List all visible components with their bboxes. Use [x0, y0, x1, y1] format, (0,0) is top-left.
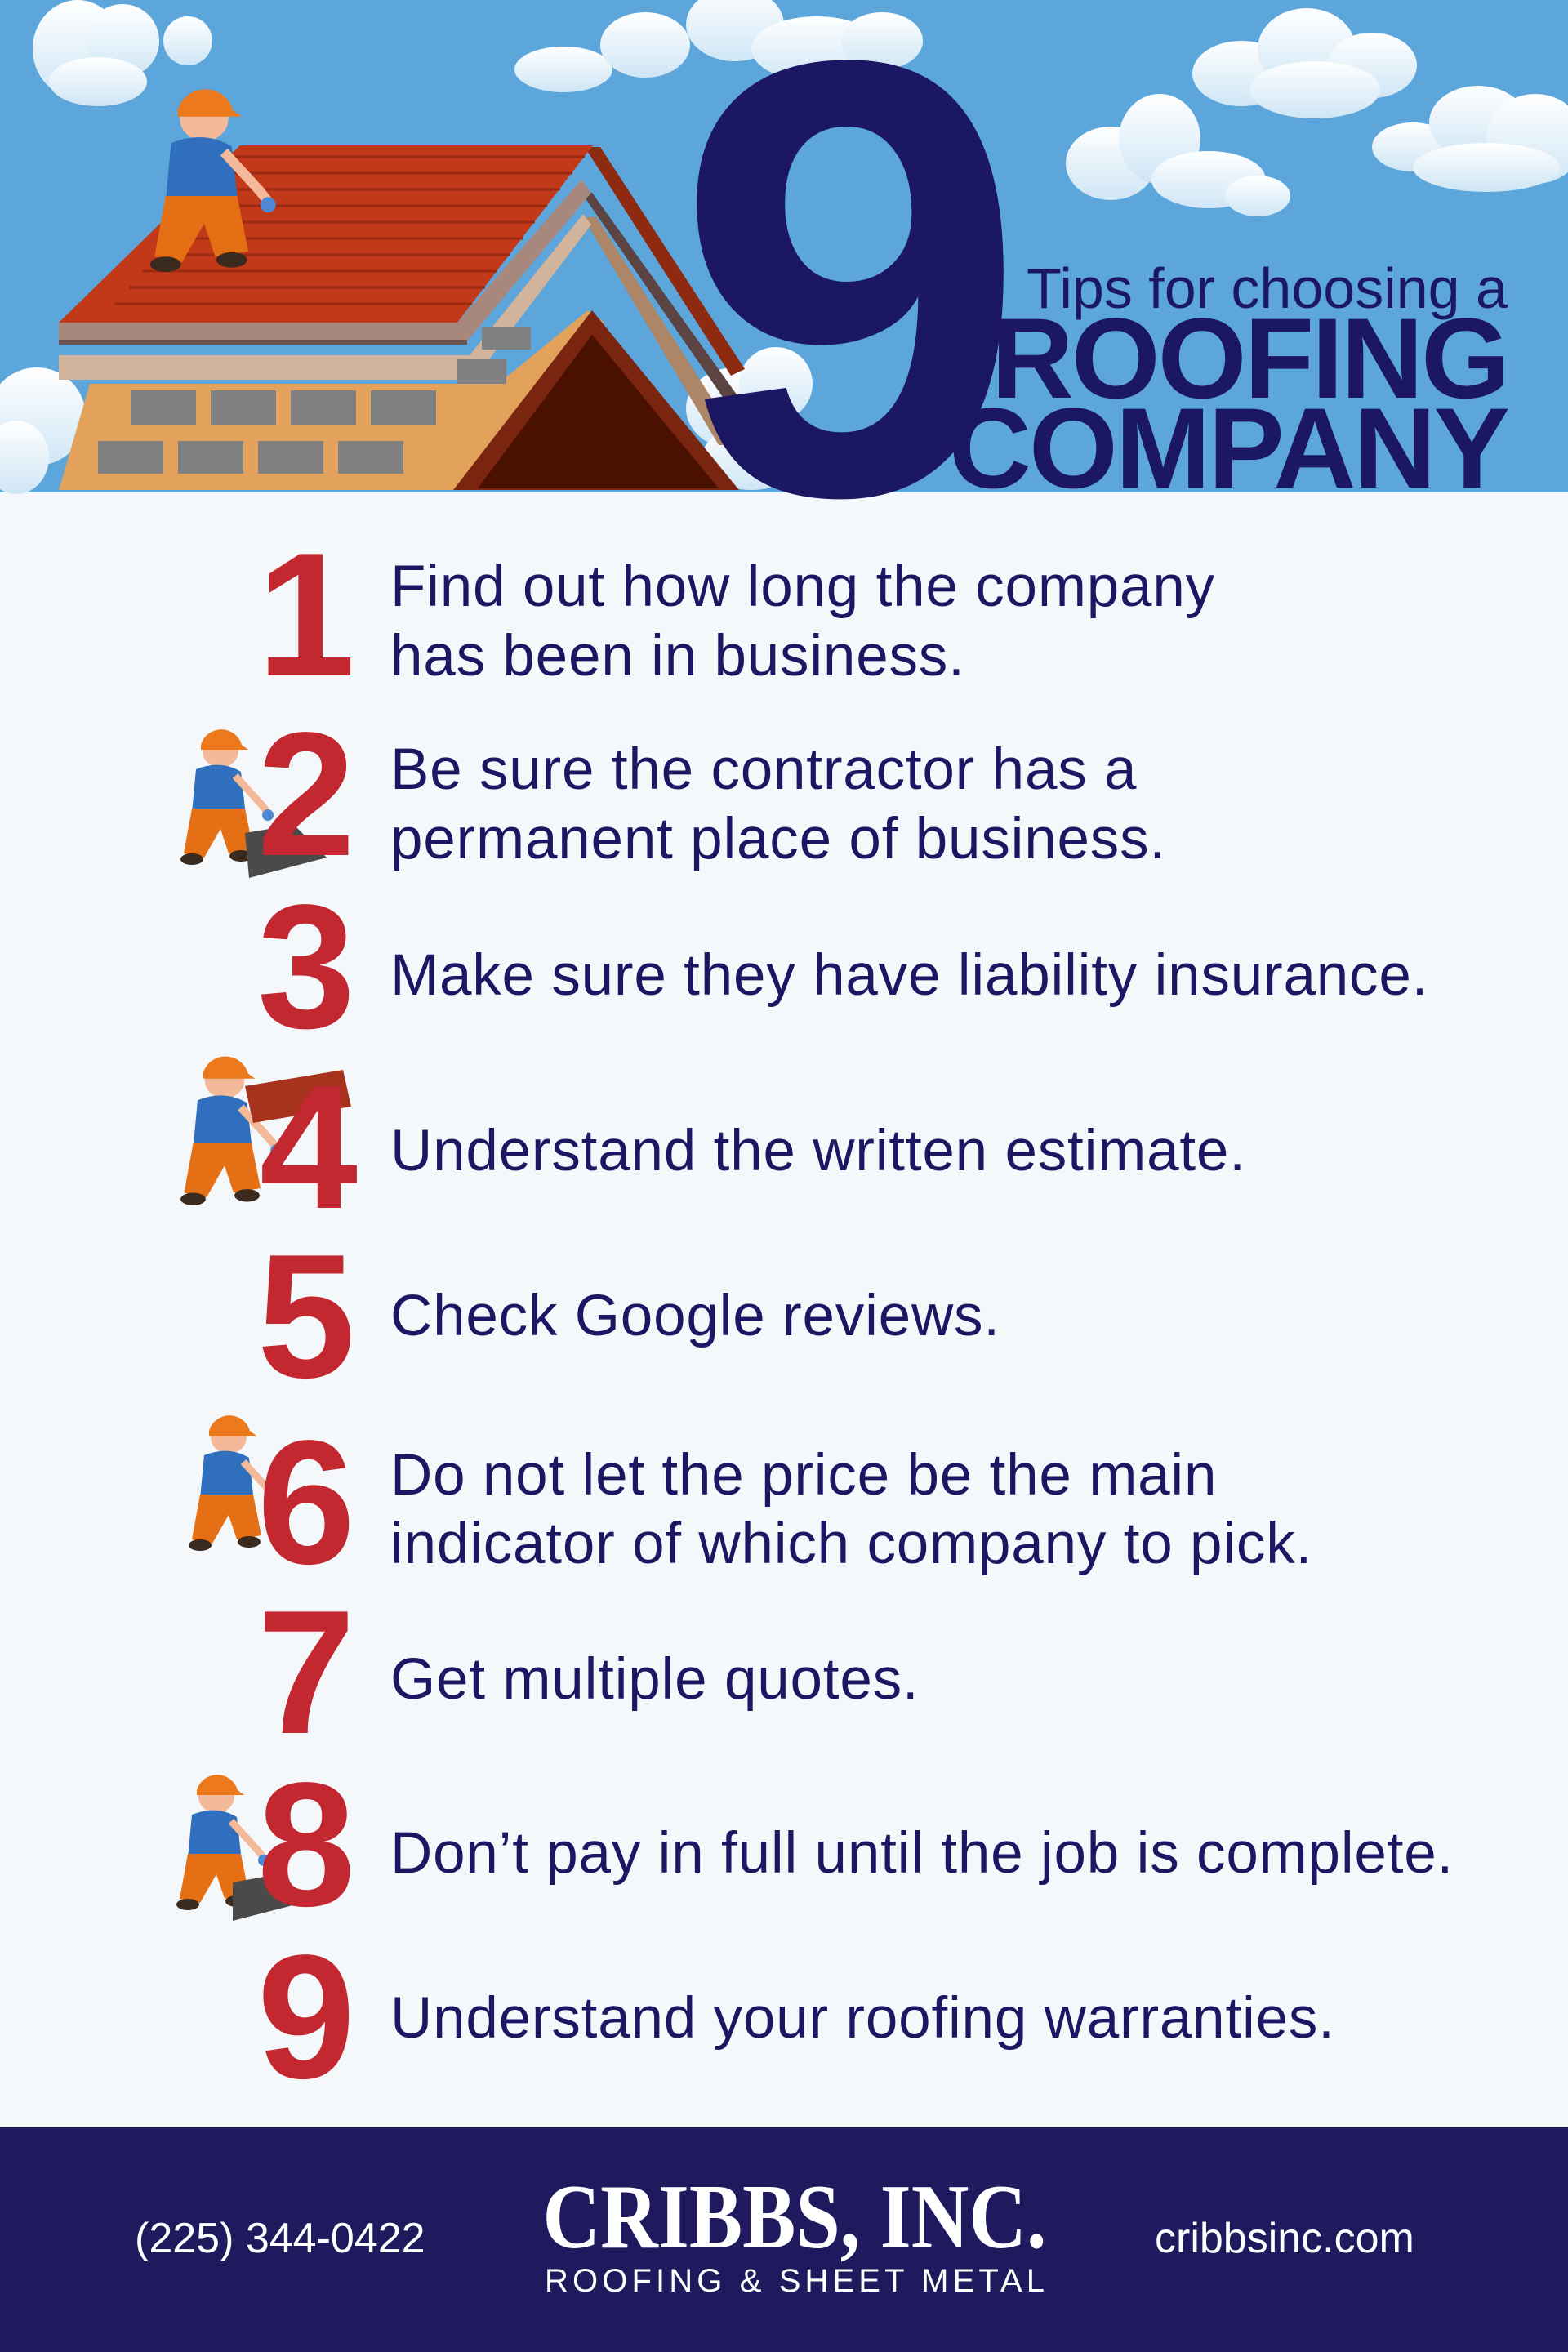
logo: ROOFING & SHEET METAL [545, 2263, 1045, 2299]
tip 4 [180, 1048, 1246, 1245]
phone: (225) 344-0422 [135, 2215, 425, 2262]
tip 6: Do not let the price be the main [390, 1443, 1217, 1508]
title: COMPANY [949, 384, 1509, 512]
tip 8: 8 [257, 1745, 355, 1943]
tip 3 [257, 867, 1428, 1065]
tip 1: has been in business. [390, 624, 965, 688]
tip 1 [257, 515, 1215, 713]
sheathing layer [59, 214, 591, 380]
gable triangle [453, 310, 739, 490]
tip 5: Check Google reviews. [390, 1284, 1000, 1348]
tip 2: Be sure the contractor has a [390, 737, 1137, 802]
roof tiles [59, 145, 593, 323]
worker on roof [150, 89, 276, 272]
tips list [176, 515, 1454, 2115]
clouds [0, 0, 1568, 494]
dark layer right [581, 193, 745, 412]
tip 2: 2 [257, 695, 355, 893]
tip 6: indicator of which company to pick. [390, 1512, 1312, 1576]
tip 3: 3 [257, 867, 355, 1065]
tip 2: permanent place of business. [390, 807, 1166, 871]
tip 2 [180, 695, 1166, 893]
red fascia right side [585, 147, 745, 376]
title [949, 256, 1509, 512]
tip 9 [257, 1918, 1335, 2115]
tip 1: Find out how long the company [390, 555, 1215, 619]
illustration: layered roof with worker [59, 89, 745, 490]
tip 3: Make sure they have liability insurance. [390, 943, 1428, 1008]
underlayment layer [59, 180, 591, 343]
tip 4: 4 [260, 1048, 358, 1245]
tip 6: 6 [257, 1403, 355, 1601]
tip 7: Get multiple quotes. [390, 1647, 919, 1712]
logo: CRIBBS, INC. [542, 2167, 1047, 2268]
title: ROOFING [991, 294, 1508, 422]
tip 5 [257, 1217, 1000, 1414]
tip 4: Understand the written estimate. [390, 1119, 1246, 1183]
tan layer right [583, 217, 742, 445]
logo [542, 2167, 1047, 2299]
tip 8: Don’t pay in full until the job is complete. [390, 1821, 1454, 1886]
wood frame [59, 310, 604, 490]
tip 7 [257, 1573, 919, 1771]
title: Tips for choosing a [1027, 256, 1508, 320]
tip 9: 9 [257, 1918, 355, 2115]
tip 8 [176, 1745, 1454, 1943]
tip 5: 5 [257, 1217, 355, 1414]
tip 7: 7 [257, 1573, 355, 1771]
tip 1: 1 [257, 515, 355, 713]
website: cribbsinc.com [1155, 2215, 1414, 2262]
header: sky panel [0, 0, 1568, 494]
tip 6 [189, 1403, 1312, 1601]
footer [0, 2127, 1568, 2352]
tip 9: Understand your roofing warranties. [390, 1986, 1335, 2051]
